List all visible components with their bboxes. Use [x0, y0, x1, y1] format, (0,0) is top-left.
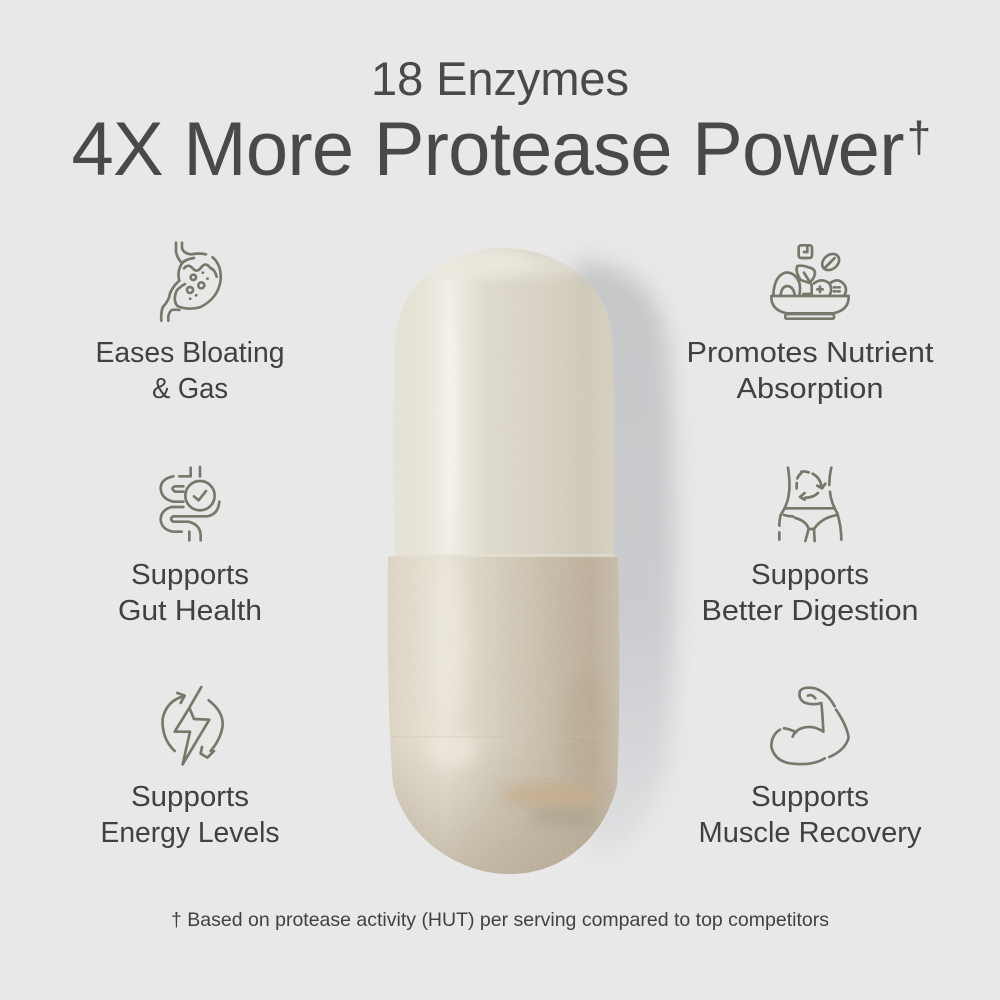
benefit: Supports Better Digestion: [702, 468, 918, 627]
icon: lightning bolt with arrows: [163, 687, 223, 764]
title: 4X More Protease Power: [72, 107, 904, 192]
benefit: Supports Muscle Recovery: [698, 688, 922, 849]
label: Promotes Nutrient: [686, 337, 934, 369]
label: Supports: [751, 781, 869, 813]
capsule shadow: [560, 260, 676, 862]
title: †: [907, 113, 931, 162]
title: [72, 52, 931, 192]
benefit: Supports Muscle Recovery: Muscle Recovery: [698, 817, 922, 849]
benefit: Supports Energy Levels: Energy Levels: [100, 817, 280, 849]
label: Supports: [751, 559, 869, 591]
benefit: Supports Energy Levels: [100, 687, 280, 849]
benefit: Supports Gut Health: Gut Health: [118, 595, 262, 627]
icon: salad bowl: [771, 245, 849, 319]
title: 18 Enzymes: [371, 52, 629, 105]
benefit: Supports Gut Health: [118, 467, 262, 627]
icon: flexed arm: [771, 688, 849, 764]
icon: abdomen with circular arrows: [779, 468, 841, 541]
footnote: † Based on protease activity (HUT) per serving compared to top competitors: [171, 909, 829, 931]
benefit: Eases Bloating & Gas: & Gas: [152, 373, 228, 405]
capsule: [380, 240, 625, 880]
label: Supports: [131, 559, 249, 591]
benefit: Promotes Nutrient Absorption: [686, 245, 934, 405]
label: Eases Bloating: [96, 337, 284, 369]
benefit: Supports Better Digestion: Better Digestion: [702, 595, 918, 627]
icon: stomach: [161, 243, 221, 321]
benefit: Eases Bloating & Gas: [96, 243, 284, 405]
icon: intestine with check: [161, 467, 219, 540]
benefit: Promotes Nutrient Absorption: Absorption: [736, 373, 884, 405]
label: Supports: [131, 781, 249, 813]
